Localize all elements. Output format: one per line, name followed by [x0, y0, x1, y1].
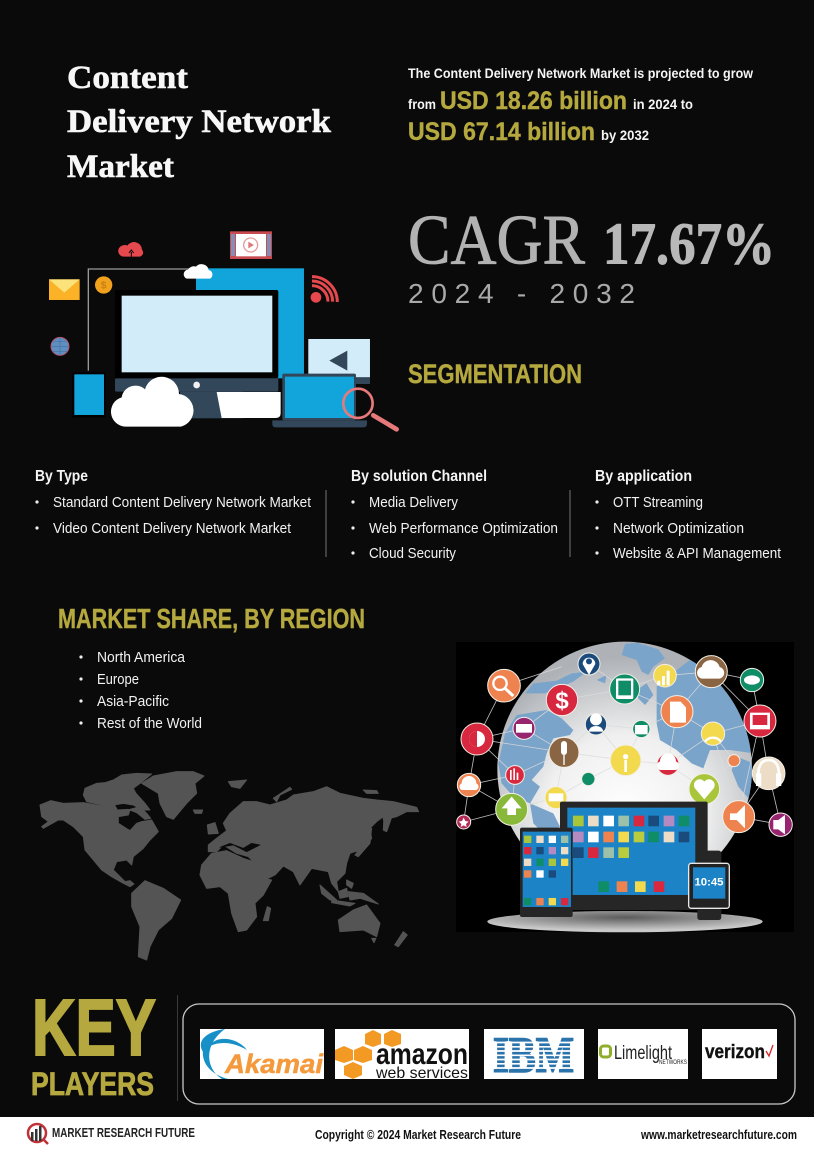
CAGR figure: 2024 - 2032 [408, 278, 635, 309]
segment column: by solution channel [351, 468, 558, 562]
illustration: devices and cloud [49, 231, 397, 429]
CAGR figure: 17.67% [603, 210, 775, 276]
title: Content [67, 60, 188, 96]
segment column: by application: Network Optimization [613, 520, 744, 537]
logo: Akamai: Akamai [224, 1049, 324, 1079]
region list: Rest of the World [97, 715, 202, 732]
globe [497, 642, 752, 852]
logo: IBM: IBM [493, 1028, 574, 1084]
market projection text: USD 67.14 billion [408, 118, 595, 146]
segment column: by application [595, 468, 782, 562]
tablet [72, 372, 105, 418]
region list: North America [97, 649, 186, 666]
segment column: by solution channel: Web Performance Optimization [369, 520, 558, 537]
phone device [520, 828, 573, 917]
logo: Amazon Web Services: amazon [376, 1038, 468, 1071]
segment column: by type: Video Content Delivery Network Market [53, 520, 292, 537]
network connection lines [464, 664, 781, 825]
market projection text: The Content Delivery Network Market is projected to grow [408, 65, 753, 81]
footer bar [0, 1117, 814, 1150]
region list: Europe [97, 671, 139, 688]
segment column: by application: Website & API Management [613, 545, 782, 562]
logo: Verizon [702, 1029, 777, 1079]
copyright: Copyright © 2024 Market Research Future [315, 1128, 521, 1142]
node glyphs [459, 658, 785, 834]
tablet device [560, 802, 708, 910]
logo: Akamai [200, 1029, 324, 1079]
monitor [115, 290, 281, 418]
icon: small cloud [184, 264, 212, 279]
icon: envelope [49, 279, 80, 300]
segment column: by type: Standard Content Delivery Network Market [53, 494, 312, 511]
smartwatch: 10:45 [694, 876, 723, 888]
market projection text: by 2032 [601, 127, 649, 143]
heading: key players: KEY [32, 983, 156, 1072]
globe and devices image [456, 642, 794, 932]
logo: Verizon: verizon [705, 1042, 765, 1063]
heading: market share by region: MARKET SHARE, BY REGION [58, 603, 365, 634]
icon: globe [51, 337, 69, 355]
segment column: by solution channel: Media Delivery [369, 494, 458, 511]
logo: Amazon Web Services [335, 1029, 469, 1082]
market projection text: from [408, 96, 436, 112]
segment column: by type: By Type [35, 468, 88, 485]
logo: Limelight Networks [598, 1029, 688, 1079]
shadow ellipse [487, 911, 763, 932]
logo: Amazon Web Services: web services [375, 1065, 468, 1082]
video panel [308, 339, 370, 384]
heading: key players [31, 983, 156, 1102]
world map [40, 772, 419, 960]
key players frame [183, 1004, 795, 1104]
title: Market [67, 149, 174, 185]
CAGR figure [408, 202, 775, 309]
icon: wifi [311, 277, 337, 303]
footer brand name: MARKET RESEARCH FUTURE [52, 1126, 195, 1140]
heading: segmentation: SEGMENTATION [408, 359, 582, 389]
market projection text: in 2024 to [633, 96, 693, 112]
segment column: by solution channel: By solution Channel [351, 468, 487, 485]
title [67, 60, 332, 185]
market projection text: USD 18.26 billion [440, 87, 627, 115]
icon: large cloud [111, 377, 193, 427]
segment column: by application: OTT Streaming [613, 494, 703, 511]
logo: Limelight Networks: NETWORKS [659, 1060, 687, 1066]
segment column: by solution channel: Cloud Security [369, 545, 456, 562]
region list [79, 649, 202, 732]
icon: film strip [230, 231, 272, 259]
icon: coin [95, 276, 112, 294]
segment column: by type [35, 468, 312, 537]
icon: magnifier [343, 389, 397, 429]
segment column: by application: By application [595, 468, 692, 485]
icon: coin: $ [101, 281, 107, 292]
footer logo icon [28, 1124, 48, 1144]
region list: Asia-Pacific [97, 693, 169, 710]
icon: red cloud upload [118, 242, 143, 257]
network icon nodes [457, 653, 792, 836]
market projection text [408, 65, 753, 146]
laptop [272, 374, 367, 427]
CAGR figure: CAGR [408, 202, 586, 280]
title: Delivery Network [67, 104, 332, 140]
node glyphs: $ [555, 688, 569, 715]
logo: Limelight Networks: Limelight [614, 1043, 673, 1064]
smartwatch [689, 851, 729, 920]
heading: key players: PLAYERS [31, 1066, 154, 1102]
